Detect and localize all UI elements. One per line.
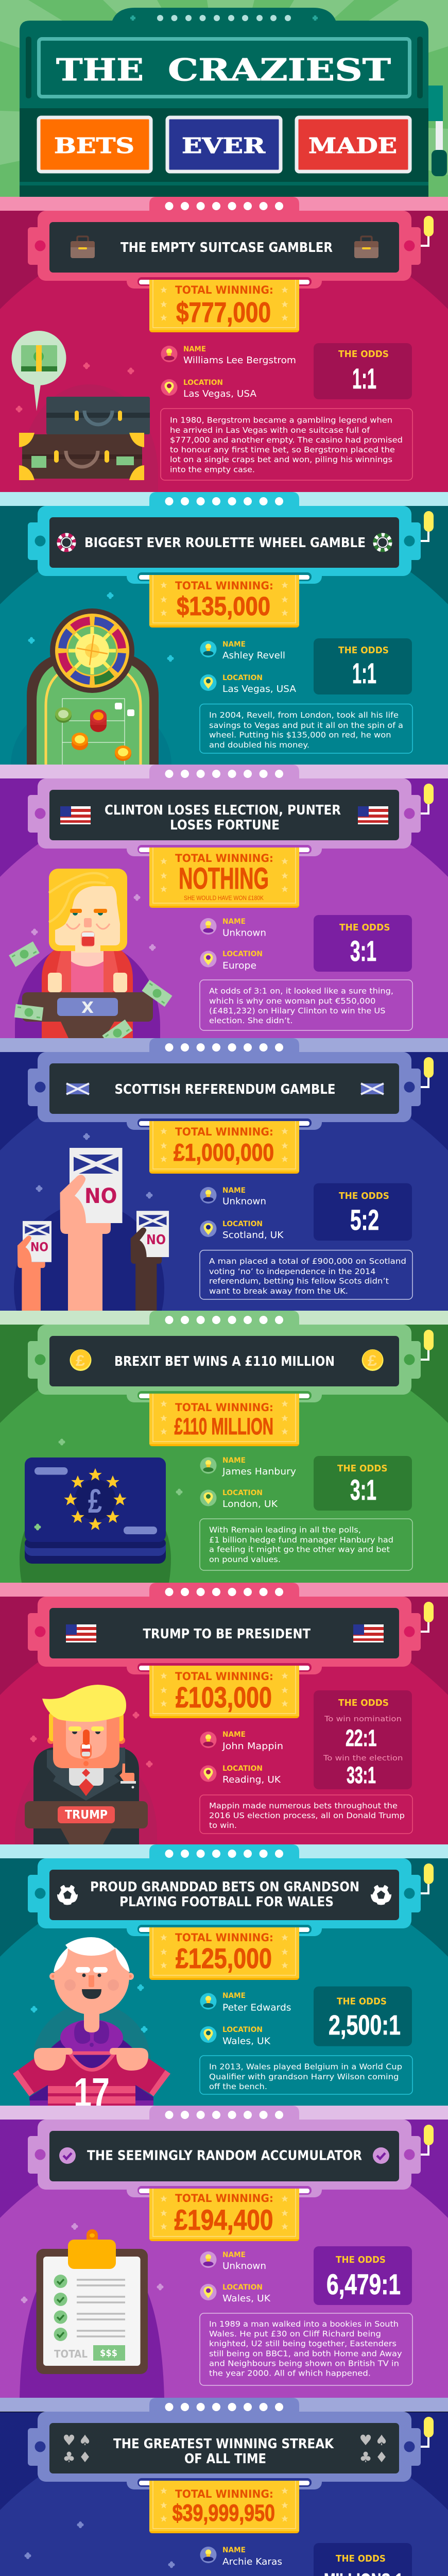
description: on pound values. <box>209 1555 281 1564</box>
heading <box>66 1624 384 1642</box>
name: Unknown <box>222 2261 266 2272</box>
description: referendum, betting his fellow Scots didn’t <box>209 1277 389 1286</box>
odds <box>314 343 412 399</box>
description: Mappin made numerous bets throughout the <box>209 1801 398 1810</box>
total winning ticket: TOTAL WINNING: <box>175 1401 273 1414</box>
description: still being on BBC1, and both Home and Away <box>209 2349 402 2358</box>
section 1: the empty suitcase gambler <box>0 197 448 492</box>
odds <box>314 1690 412 1789</box>
slot machine lever <box>428 86 447 176</box>
total winning ticket <box>149 280 299 332</box>
location <box>200 1220 284 1241</box>
description: want to break away from the UK. <box>209 1286 348 1296</box>
location: LOCATION <box>222 950 263 958</box>
reel: ever <box>167 117 281 172</box>
total winning ticket: £194,400 <box>174 2204 273 2236</box>
section 7: proud granddad <box>0 1844 448 2115</box>
odds: To win the election <box>323 1754 403 1762</box>
odds: 1:1 <box>352 657 376 689</box>
reel: bets <box>39 117 151 172</box>
description: knighted, U2 still being together, Eastenders <box>209 2339 397 2348</box>
heading: ♠ <box>375 2432 388 2449</box>
heading: £ <box>368 1352 377 1369</box>
illustration: donald trump at podium: TRUMP <box>65 1808 108 1822</box>
name: James Hanbury <box>222 1466 296 1477</box>
total winning ticket <box>149 1394 299 1446</box>
description: and Neighbours being shown on British TV in <box>209 2359 399 2368</box>
name: Archie Karas <box>222 2556 282 2567</box>
description: $777,000 and another empty. The casino had promised <box>170 435 403 445</box>
description: to win. <box>209 1821 237 1830</box>
total winning ticket: TOTAL WINNING: <box>175 2192 273 2205</box>
section 6: trump to be president <box>0 1583 448 1844</box>
header: slot machine background <box>0 0 448 197</box>
illustration: raised hands with no signs: NO <box>84 1184 117 1208</box>
heading: OF ALL TIME <box>184 2451 266 2467</box>
description: off the bench. <box>209 2082 267 2091</box>
section 5: brexit bet <box>0 1311 448 1583</box>
illustration: betting slip clipboard: $$$ <box>100 2348 117 2359</box>
name <box>200 2546 282 2567</box>
description: 2016 US election process, all on Donald Trump <box>209 1811 405 1820</box>
odds: 3:1 <box>350 1473 376 1506</box>
description: Qualifier with grandson Harry Wilson coming <box>209 2072 399 2081</box>
illustration: grandfather holding jersey: 17 <box>74 2070 110 2115</box>
illustration: hillary clinton at podium: X <box>81 999 94 1017</box>
slot machine body <box>20 8 428 197</box>
total winning ticket <box>149 848 299 908</box>
name <box>200 1731 283 1752</box>
location: Las Vegas, USA <box>183 388 257 399</box>
description <box>200 2313 412 2385</box>
odds: THE ODDS <box>337 1996 387 2007</box>
heading: LOSES FORTUNE <box>170 818 280 833</box>
heading <box>62 2432 388 2467</box>
odds: THE ODDS <box>338 645 389 656</box>
heading: CLINTON LOSES ELECTION, PUNTER <box>105 803 341 818</box>
location <box>200 1489 278 1510</box>
heading: SCOTTISH REFERENDUM GAMBLE <box>114 1082 336 1097</box>
location: Wales, UK <box>222 2293 271 2304</box>
section 3: clinton loses election <box>0 765 448 1038</box>
title screen <box>39 39 410 97</box>
location: LOCATION <box>222 1489 263 1497</box>
heading: ♥ <box>62 2432 76 2449</box>
total winning ticket: $135,000 <box>177 591 270 621</box>
total winning ticket: TOTAL WINNING: <box>175 2488 273 2501</box>
description <box>200 1250 412 1299</box>
heading: PLAYING FOOTBALL FOR WALES <box>119 1894 334 1910</box>
reel: made <box>297 117 410 172</box>
name <box>200 2251 266 2272</box>
heading: ♥ <box>359 2432 372 2449</box>
description: With Remain leading in all the polls, <box>209 1525 361 1534</box>
total winning ticket: £110 MILLION <box>174 1413 273 1439</box>
total winning ticket <box>149 1927 299 1980</box>
heading <box>70 1349 384 1371</box>
name <box>200 918 266 939</box>
description: and doubled his money. <box>209 740 309 750</box>
section 2: roulette wheel gamble <box>0 492 448 765</box>
heading <box>71 236 378 258</box>
description: savings to Vegas and put it all on the spin of a <box>209 721 403 730</box>
odds: 22:1 <box>346 1725 377 1751</box>
heading: ♠ <box>78 2432 92 2449</box>
location <box>200 2026 271 2046</box>
illustration: betting slip clipboard: TOTAL <box>54 2348 88 2360</box>
name: Ashley Revell <box>222 650 285 661</box>
location: London, UK <box>222 1499 278 1510</box>
location <box>200 1765 281 1785</box>
odds: 33:1 <box>347 1762 376 1788</box>
name: NAME <box>222 918 246 926</box>
location: LOCATION <box>222 2026 263 2034</box>
location: LOCATION <box>222 2283 263 2292</box>
name: NAME <box>222 1731 246 1739</box>
name <box>200 1187 266 1207</box>
name: NAME <box>222 1187 246 1195</box>
total winning ticket <box>149 2189 299 2241</box>
description <box>200 2056 412 2094</box>
total winning ticket: £103,000 <box>176 1681 272 1714</box>
illustration: donald trump at podium <box>25 1685 151 1844</box>
name <box>200 640 285 661</box>
total winning ticket: £125,000 <box>176 1942 272 1974</box>
total winning ticket: $39,999,950 <box>173 2500 275 2526</box>
heading: £ <box>76 1352 85 1369</box>
location <box>200 950 263 971</box>
illustration: pound banknotes with eu stars: £ <box>88 1482 102 1520</box>
location: Europe <box>222 960 256 971</box>
illustration: grandfather holding jersey <box>13 1937 170 2115</box>
name: Williams Lee Bergstrom <box>183 355 296 366</box>
heading: ♦ <box>375 2449 388 2466</box>
heading: THE GREATEST WINNING STREAK <box>113 2436 334 2452</box>
title screen: CRAZIEST <box>168 52 391 88</box>
odds: 1:1 <box>352 362 376 395</box>
description: which is why one woman put €550,000 <box>209 996 376 1006</box>
illustration: pound banknotes with eu stars <box>25 1440 181 1564</box>
illustration: suitcases and cash bubble <box>11 331 150 480</box>
odds: THE ODDS <box>338 349 389 360</box>
odds <box>314 1183 412 1241</box>
description: he arrived in Las Vegas with one suitcase full of <box>170 426 370 435</box>
name <box>200 1456 296 1477</box>
total winning ticket: TOTAL WINNING: <box>175 1126 273 1139</box>
description: voting ‘no’ to independence in the 2014 <box>209 1267 376 1276</box>
location: Scotland, UK <box>222 1230 284 1241</box>
heading: BREXIT BET WINS A £110 MILLION <box>114 1354 335 1369</box>
odds: THE ODDS <box>339 1191 389 1201</box>
name <box>161 345 296 366</box>
name: Peter Edwards <box>222 2003 291 2013</box>
heading: ♦ <box>78 2449 92 2466</box>
reel: made: MADE <box>308 133 397 158</box>
description <box>161 409 412 480</box>
description: to honour any first time bet, so Bergstrom placed the <box>170 445 395 454</box>
illustration: card table <box>26 2523 173 2576</box>
illustration: roulette table <box>27 594 172 765</box>
total winning ticket: TOTAL WINNING: <box>175 284 273 297</box>
heading: ♣ <box>62 2449 76 2466</box>
name: NAME <box>222 1992 246 2000</box>
location: Wales, UK <box>222 2036 271 2046</box>
name: NAME <box>222 640 246 649</box>
odds: 5:2 <box>350 1204 379 1236</box>
odds: THE ODDS <box>336 2553 386 2564</box>
description: A man placed a total of £900,000 on Scotland <box>209 1257 406 1266</box>
total winning ticket: TOTAL WINNING: <box>175 852 273 865</box>
total winning ticket: £1,000,000 <box>174 1139 274 1166</box>
title screen: THE <box>56 52 144 88</box>
description: £1 billion hedge fund manager Hanbury had <box>209 1535 393 1545</box>
section 8: random accumulator <box>0 2106 448 2398</box>
heading: BIGGEST EVER ROULETTE WHEEL GAMBLE <box>84 535 366 551</box>
odds: THE ODDS <box>336 2255 386 2265</box>
illustration: hillary clinton at podium <box>9 869 173 1046</box>
total winning ticket: TOTAL WINNING: <box>175 580 273 592</box>
odds: THE ODDS <box>339 922 390 933</box>
total winning ticket: TOTAL WINNING: <box>175 1931 273 1944</box>
illustration: betting slip clipboard <box>23 2225 162 2374</box>
description: In 1980, Bergstrom became a gambling legend when <box>170 415 392 425</box>
description: In 2013, Wales played Belgium in a World Cup <box>209 2062 402 2071</box>
location <box>200 2283 271 2304</box>
description: lot on a single craps bet and won, piling his winnings <box>170 455 392 464</box>
description: the year 2000. All of which happened. <box>209 2369 371 2378</box>
odds: 2,500:1 <box>329 2010 401 2041</box>
odds: THE ODDS <box>337 1463 387 1474</box>
description: wheel. Putting his $135,000 on red, he won <box>209 731 391 740</box>
odds: THE ODDS <box>338 1698 389 1708</box>
name: NAME <box>222 2251 246 2259</box>
section 4: scottish referendum gamble <box>0 1038 448 1311</box>
odds: 3:1 <box>350 935 376 967</box>
odds <box>314 2246 412 2305</box>
reel: bets: BETS <box>54 133 134 158</box>
heading: TRUMP TO BE PRESIDENT <box>143 1626 311 1642</box>
total winning ticket: TOTAL WINNING: <box>175 1670 273 1683</box>
description <box>200 980 412 1030</box>
description <box>200 1519 412 1570</box>
heading: PROUD GRANDDAD BETS ON GRANDSON <box>90 1879 359 1895</box>
description: a feeling it might go the other way and bet <box>209 1545 390 1554</box>
location: LOCATION <box>222 1220 263 1228</box>
heading: THE EMPTY SUITCASE GAMBLER <box>120 240 333 256</box>
odds: 6,479:1 <box>326 2268 401 2300</box>
name: Unknown <box>222 1196 266 1207</box>
name: John Mappin <box>222 1741 283 1752</box>
heading: THE SEEMINGLY RANDOM ACCUMULATOR <box>87 2148 362 2164</box>
description: into the empty case. <box>170 465 255 474</box>
total winning ticket: SHE WOULD HAVE WON £180K <box>184 895 264 902</box>
name: Unknown <box>222 928 266 939</box>
heading <box>55 1879 393 1910</box>
total winning ticket: $777,000 <box>176 296 271 328</box>
location: Reading, UK <box>222 1774 281 1785</box>
section 9: greatest winning streak <box>0 2398 448 2576</box>
location: LOCATION <box>183 379 223 387</box>
odds <box>314 1456 412 1511</box>
illustration: raised hands with no signs <box>18 1134 169 1437</box>
illustration: raised hands with no signs: NO <box>146 1232 166 1248</box>
odds <box>314 1987 412 2046</box>
heading: ♣ <box>359 2449 372 2466</box>
location <box>161 379 257 399</box>
description: In 1989 a man walked into a bookies in South <box>209 2319 399 2329</box>
total winning ticket <box>149 575 299 628</box>
description: election. She didn’t. <box>209 1016 292 1025</box>
total winning ticket: NOTHING <box>179 862 269 895</box>
description: Wales. He put £30 on Cliff Richard being <box>209 2329 381 2338</box>
odds: To win nomination <box>324 1715 402 1723</box>
reel: ever: EVER <box>182 133 266 158</box>
location: LOCATION <box>222 1765 263 1773</box>
location <box>200 674 297 694</box>
description: At odds of 3:1 on, it looked like a sure thing, <box>209 986 393 995</box>
location: LOCATION <box>222 674 263 682</box>
location: Las Vegas, USA <box>222 684 297 694</box>
description: (£481,232) on Hilary Clinton to win the US <box>209 1006 385 1015</box>
description <box>200 1795 412 1834</box>
name: NAME <box>222 1456 246 1465</box>
total winning ticket <box>149 1121 299 1174</box>
heading <box>60 803 388 833</box>
name: NAME <box>183 345 206 353</box>
description <box>200 704 412 753</box>
odds <box>314 2543 412 2576</box>
description: In 2004, Revell, from London, took all his life <box>209 710 399 720</box>
illustration: raised hands with no signs: NO <box>30 1240 48 1255</box>
name: NAME <box>222 2546 246 2554</box>
total winning ticket <box>149 2481 299 2533</box>
odds <box>314 915 412 972</box>
name <box>200 1992 291 2013</box>
total winning ticket <box>149 1666 299 1718</box>
odds <box>314 638 412 694</box>
